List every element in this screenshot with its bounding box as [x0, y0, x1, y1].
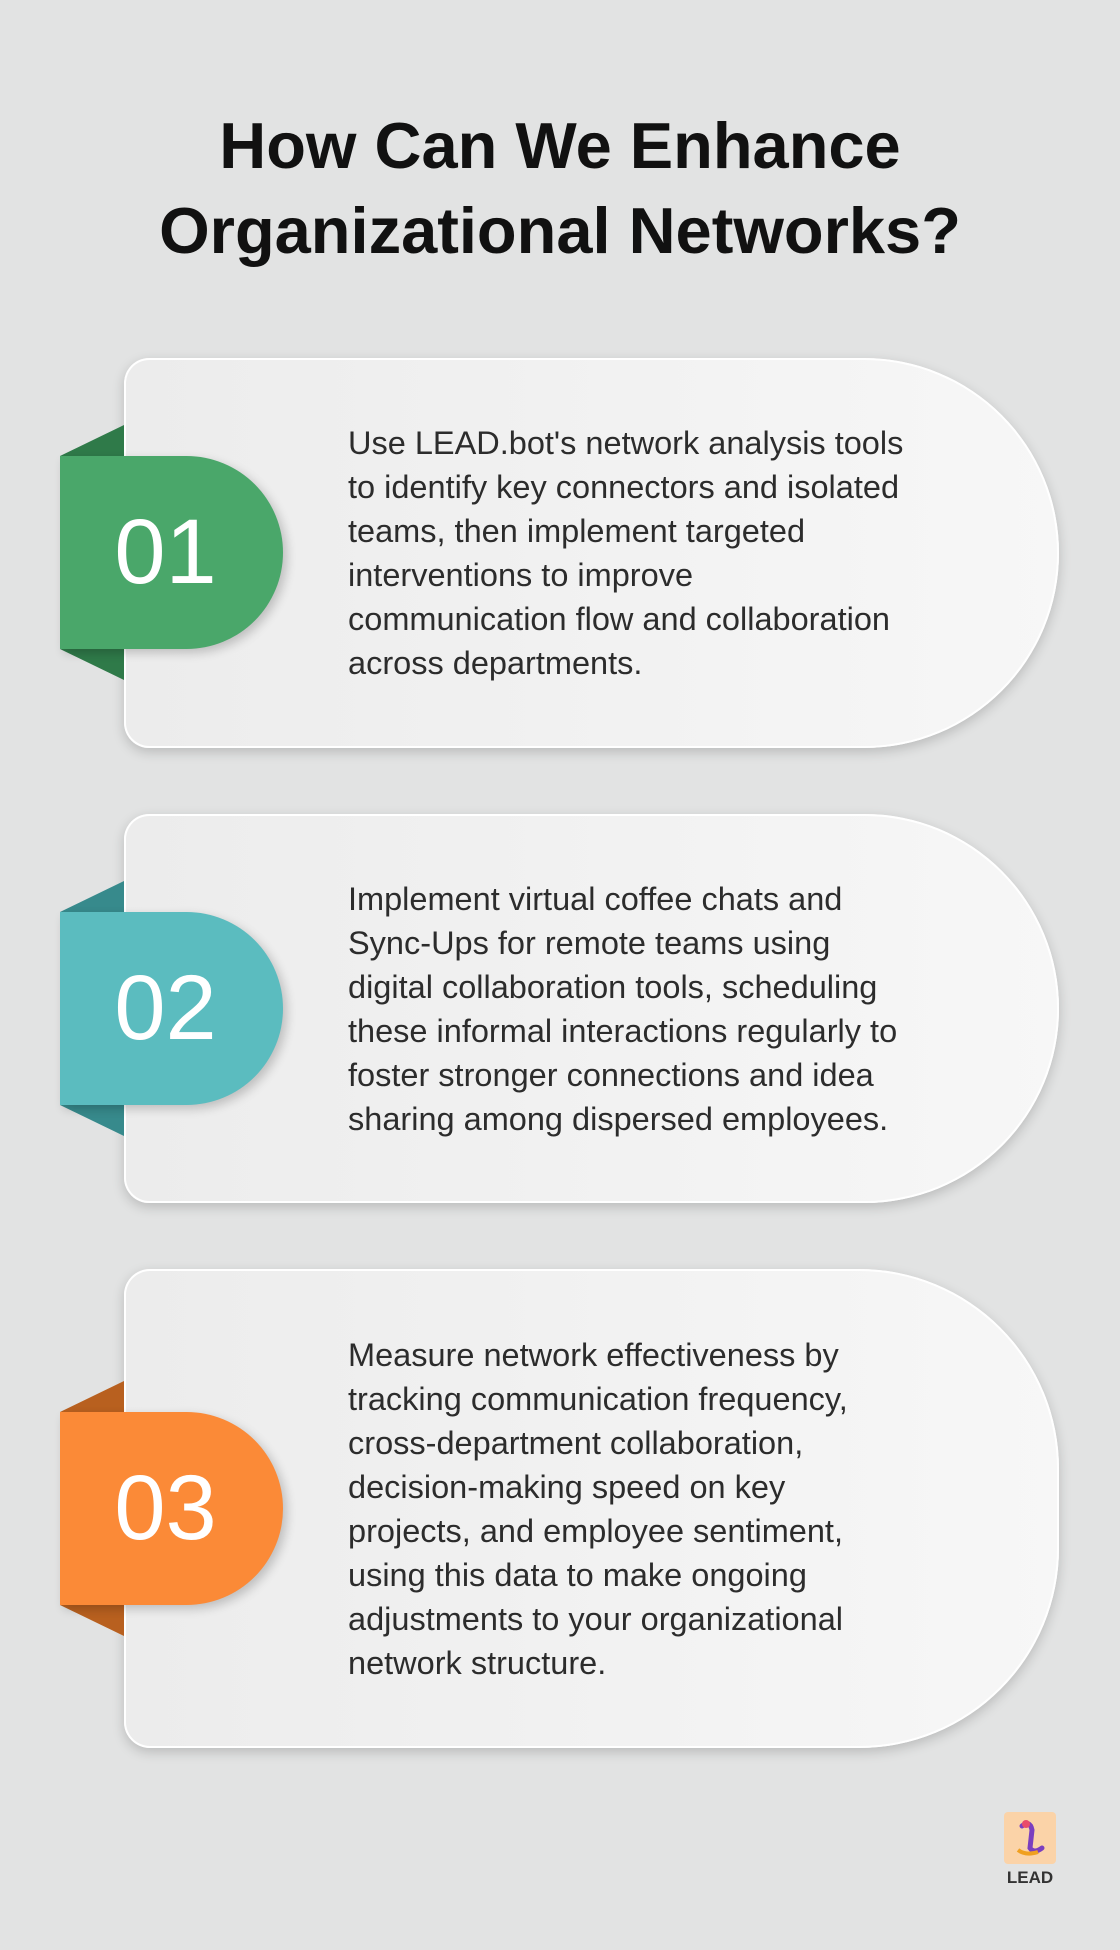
- text: step 2: these informal interactions regularly to: [348, 1012, 897, 1048]
- text: step 1: interventions to improve: [348, 557, 693, 593]
- badge: 01: 01: [114, 501, 217, 603]
- text: step 2: Sync-Ups for remote teams using: [348, 924, 830, 960]
- text: step 1: Use LEAD.bot's network analysis tools: [348, 425, 903, 461]
- text: step 3: Measure network effectiveness by: [348, 1336, 839, 1372]
- text: step 1: communication flow and collaboration: [348, 601, 890, 637]
- panel: step 2: [124, 814, 1059, 1203]
- logo: [1004, 1812, 1056, 1887]
- panel: step 3: [124, 1269, 1059, 1748]
- badge: 02: [60, 881, 292, 1136]
- text: step 3: tracking communication frequency,: [348, 1380, 848, 1416]
- badge: 02: 02: [114, 957, 217, 1059]
- text: step 1: across departments.: [348, 645, 642, 681]
- badge: 01: [60, 425, 292, 680]
- badge: 03: 03: [114, 1457, 217, 1559]
- text: step 2: digital collaboration tools, scheduling: [348, 968, 877, 1004]
- text: step 2: Implement virtual coffee chats and: [348, 880, 842, 916]
- text: step 1: to identify key connectors and isolated: [348, 469, 899, 505]
- text: step 3: [348, 1336, 848, 1680]
- text: step 2: [348, 880, 897, 1136]
- text: step 2: sharing among dispersed employees.: [348, 1100, 888, 1136]
- text: step 3: cross-department collaboration,: [348, 1424, 803, 1460]
- text: step 3: network structure.: [348, 1644, 606, 1680]
- badge: 03: [60, 1381, 292, 1636]
- text: step 3: decision-making speed on key: [348, 1468, 785, 1504]
- text: step 3: adjustments to your organizational: [348, 1600, 843, 1636]
- icon: logo mark: [1004, 1812, 1056, 1864]
- text: step 1: [348, 425, 903, 681]
- text: step 2: foster stronger connections and idea: [348, 1056, 874, 1092]
- text: step 3: projects, and employee sentiment,: [348, 1512, 843, 1548]
- panel: step 1: [124, 358, 1059, 748]
- title: Organizational Networks?: [159, 194, 961, 267]
- text: step 1: teams, then implement targeted: [348, 513, 805, 549]
- text: step 3: using this data to make ongoing: [348, 1556, 807, 1592]
- logo text: LEAD: [1007, 1868, 1053, 1887]
- title: How Can We Enhance: [219, 109, 901, 182]
- title: [159, 109, 961, 267]
